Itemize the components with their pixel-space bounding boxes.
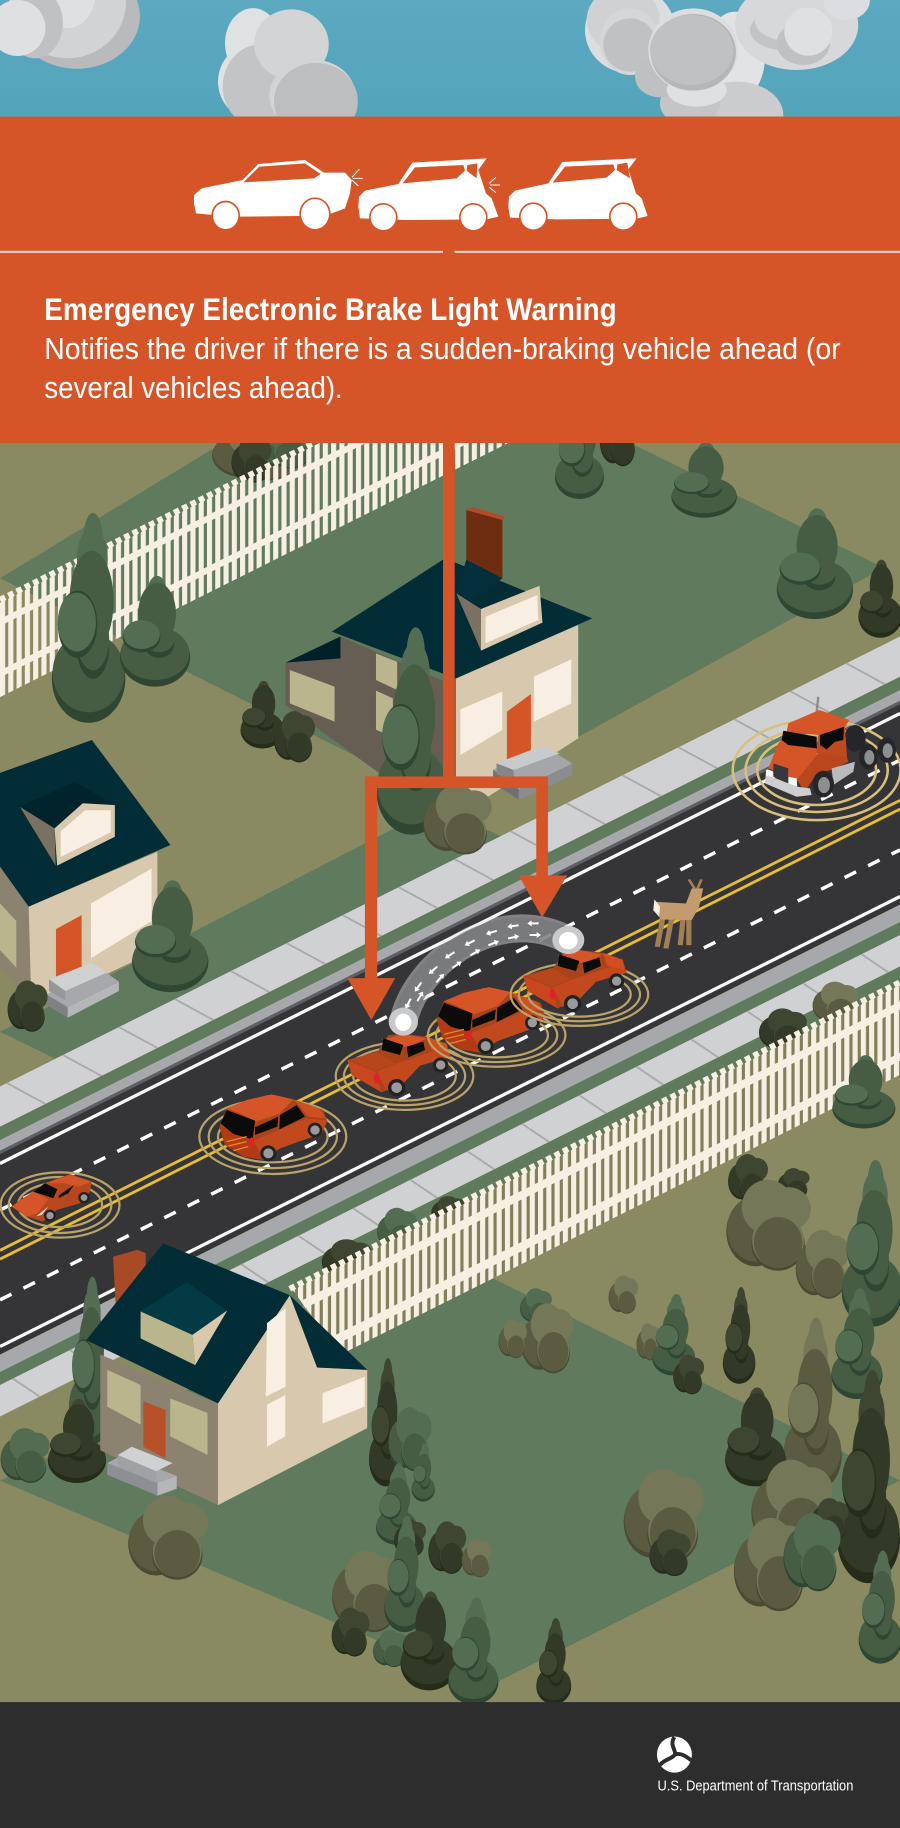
trees along upper fence [52,513,190,723]
arrows: inner row [415,932,541,1003]
description [44,331,841,405]
icon: rear car [508,158,648,231]
lawn: bottom [0,1275,900,1687]
footer bar [0,1702,900,1828]
car 4: SUV with sensor rings [428,987,565,1067]
trees behind lower fence [322,982,858,1279]
DOT logo [657,1736,692,1773]
arrow: banner to two vehicles [347,443,567,1020]
deer [653,879,703,948]
right arrowhead [519,876,567,917]
clouds [0,0,870,148]
trees in lawn centre [332,1358,571,1704]
description: Notifies the driver if there is a sudden-braking vehicle ahead (or [44,331,841,366]
chimney [466,507,505,578]
house: left [0,740,170,1018]
icon: three cars braking [194,158,648,232]
divider [0,251,900,253]
road [0,677,900,1385]
car 3: pickup with sensor rings [336,1034,473,1110]
chimney [113,1250,146,1323]
centre double yellow line [0,800,900,1259]
dormer [20,782,115,866]
roof [332,558,592,679]
lane dashes [0,760,900,1300]
trees on right verge [609,1055,900,1327]
edge lines [0,713,900,1347]
heading: Emergency Electronic Brake Light Warning [44,292,617,327]
signal arc between vehicles [389,920,584,1036]
lower picket fence [290,982,900,1355]
upper picket fence [0,442,508,697]
lawn: left house [0,807,513,1059]
trees behind upper fence [212,422,314,483]
description: several vehicles ahead). [44,370,343,405]
left arrowhead [347,978,395,1020]
cloud: top right [585,0,870,148]
icon: middle car [358,158,500,232]
trees near left house [8,880,208,1032]
house: bottom [86,1243,367,1505]
trees around centre house [240,627,492,855]
truck with sensor rings [733,697,900,820]
dormer [456,586,542,651]
steps [493,746,572,800]
lawn: upper [0,408,884,806]
roof [0,740,170,907]
cloud: top centre [218,8,358,140]
sky [0,0,900,118]
icon: lead car [194,160,363,231]
lower sidewalk [0,935,900,1416]
trees left of bottom house [1,1277,111,1483]
signal source glows [389,926,584,1036]
tree below bottom house [128,1496,208,1580]
car 1: sports car with sensor rings [1,1172,119,1238]
trees in bottom lawn [498,1287,900,1664]
steps [47,963,119,1018]
house: centre [286,507,592,816]
upper sidewalk [0,637,900,1127]
car 5: pickup with sensor rings [511,950,648,1026]
arrows: outer row [403,920,539,1010]
steps [107,1447,177,1496]
roof [86,1243,290,1403]
cloud: top left [0,0,140,69]
trees at top right [555,394,900,638]
car 2: SUV with sensor rings [199,1094,346,1174]
agency name: U.S. Department of Transportation [658,1778,853,1795]
orange title banner [0,117,900,443]
